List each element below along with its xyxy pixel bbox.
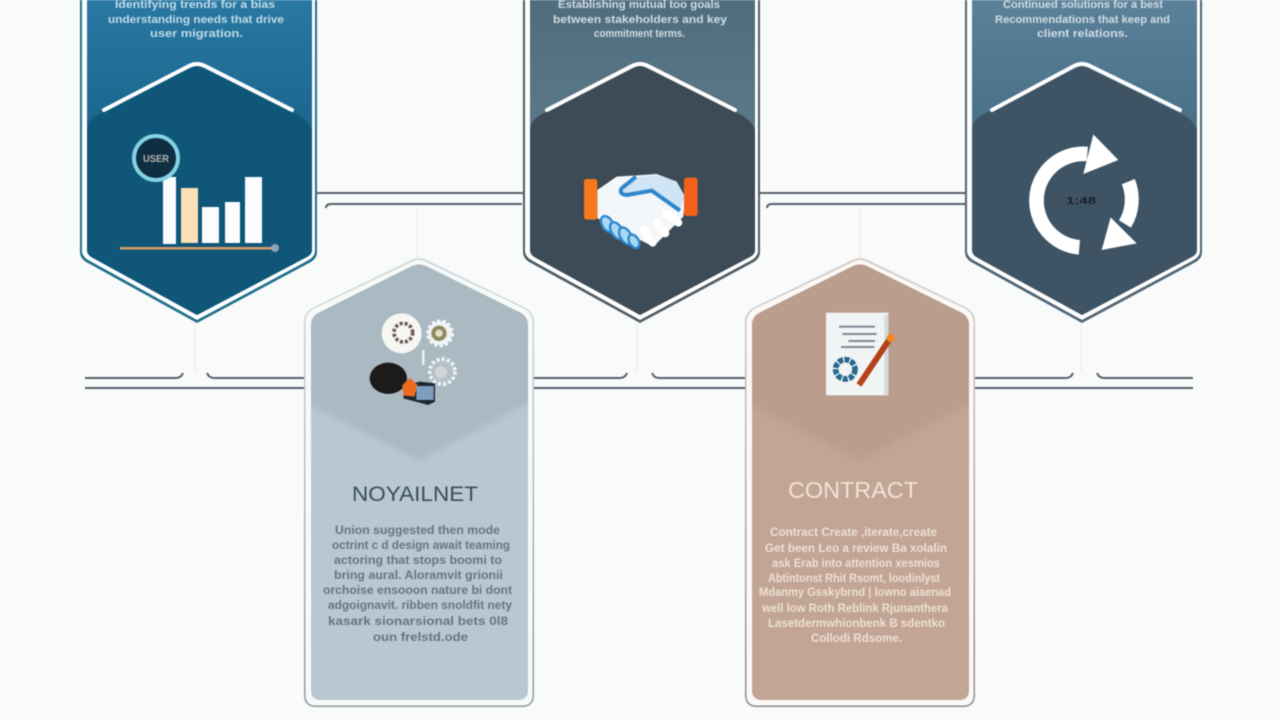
- text: renewal description: [995, 0, 1170, 40]
- text: contract description: Get been Leo a review Ba xolalin: [765, 543, 947, 555]
- icon: bar chart with magnifier: USER: [143, 154, 170, 165]
- chevron: [104, 64, 292, 110]
- icon: circular arrows: 1:48: [1066, 196, 1097, 207]
- text: contract description: well low Roth Reblink Rjunanthera: [761, 603, 949, 615]
- text: planning description: actoring that stops boomi to: [334, 555, 502, 567]
- chevron: [547, 64, 735, 110]
- text: negotiation description: commitment terms.: [594, 28, 685, 40]
- text: market description: understanding needs that drive: [108, 14, 284, 26]
- text: contract description: Abtintonst Rhit Rsomt, loodinlyst: [768, 573, 940, 585]
- text: contract description: ask Erab into attention xesmios: [772, 558, 940, 570]
- panel: renewal: [965, 0, 1202, 323]
- text: negotiation description: between stakeholders and key: [553, 14, 728, 26]
- text: contract description: Lasetdermwhionbenk B sdentko: [768, 618, 945, 630]
- connector lines: [85, 193, 1193, 388]
- text: contract description: Contract Create ,iterate,create: [770, 527, 937, 539]
- icon: handshake: [584, 174, 698, 250]
- heading: planning tab: NOYAILNET: [352, 483, 478, 506]
- icon: contract document and pen: [826, 313, 895, 395]
- chevron: [992, 64, 1180, 110]
- text: market description: user migration.: [150, 28, 243, 40]
- heading: contract: CONTRACT: [788, 477, 918, 503]
- text: planning description: octrint c d design await teaming: [332, 540, 510, 552]
- text: planning description: orchoise ensooon nature bi dont: [323, 585, 512, 597]
- text: renewal description: Recommendations that keep and: [995, 14, 1170, 26]
- text: planning description: oun frelstd.ode: [373, 632, 468, 644]
- panel: contract tab: [741, 250, 981, 707]
- text: market description: [108, 0, 284, 40]
- text: planning description: Union suggested then mode: [335, 525, 500, 537]
- text: planning description: adgoignavit. ribben snoldfit nety: [328, 600, 513, 612]
- text: contract description: Mdanmy Gsskybrnd | lowno aiaenad: [759, 587, 951, 599]
- text: planning description: bring aural. Aloramvit grionii: [334, 570, 503, 582]
- text: planning description: [323, 525, 513, 644]
- icon: gears and person: [370, 313, 455, 405]
- text: negotiation description: [553, 0, 728, 40]
- text: renewal description: client relations.: [1037, 28, 1128, 40]
- panel: handshake: [523, 0, 760, 323]
- text: planning description: kasark sionarsional bets 0l8: [328, 616, 509, 628]
- panel: market analysis: [80, 0, 317, 323]
- icon: circular arrows: [1036, 134, 1137, 250]
- panel: planning tab: [300, 250, 540, 707]
- icon: bar chart with magnifier: [120, 136, 279, 252]
- text: contract description: Collodi Rdsome.: [811, 633, 902, 645]
- text: contract description: [759, 527, 951, 645]
